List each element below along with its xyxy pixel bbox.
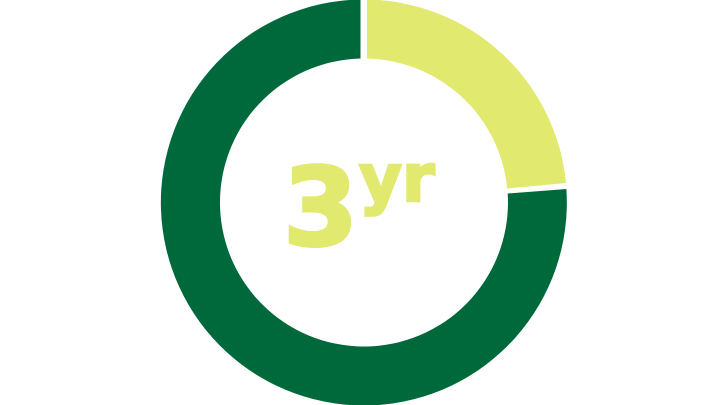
numeral 3: 3: [283, 146, 358, 271]
center label: 3 yr: [283, 140, 435, 271]
unit yr: yr: [359, 140, 435, 217]
donut segment: 3 year light green: [367, 0, 566, 188]
donut segment: remaining dark green: [161, 0, 567, 405]
